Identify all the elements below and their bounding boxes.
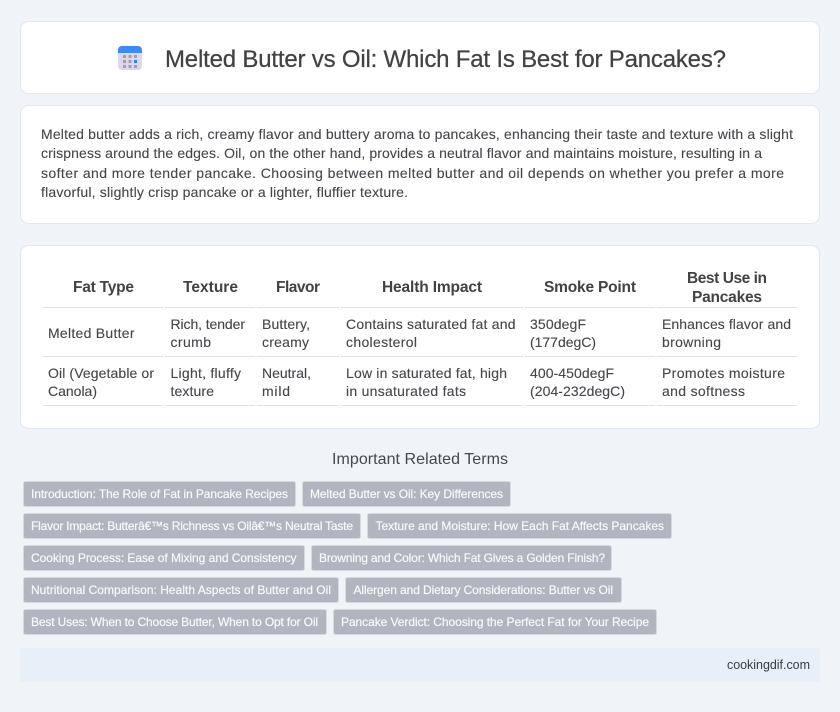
- table header row: Health Impact: [382, 279, 482, 296]
- table row: oil: Canola): [48, 383, 97, 399]
- tag: Browning and Color: Which Fat Gives a Golden Finish?: [319, 551, 605, 565]
- tag: Melted Butter vs Oil: Key Differences: [310, 487, 503, 501]
- table row: oil: texture: [170, 383, 214, 399]
- table row: oil: Light, fluffy: [170, 365, 241, 381]
- table row: oil: in unsaturated fats: [346, 383, 466, 399]
- text block: introduction: softer and more tender pancake. Choosing between melted butter and oil depends on whether you prefer a more: [41, 165, 784, 181]
- panel: introduction: [20, 106, 820, 224]
- table row: oil: mild: [262, 383, 290, 399]
- table row: melted butter: cholesterol: [346, 334, 417, 350]
- table row: oil: and softness: [662, 383, 745, 399]
- table row: oil: [48, 365, 785, 399]
- tag: [368, 514, 672, 538]
- table row: oil: Oil (Vegetable or: [48, 365, 154, 381]
- table header row: Pancakes: [692, 289, 762, 306]
- table row: oil: (204-232degC): [530, 383, 625, 399]
- text block: introduction: Melted butter adds a rich, creamy flavor and buttery aroma to pancakes, enhancing their taste and texture with a slight: [41, 126, 793, 142]
- table row: melted butter: creamy: [262, 334, 309, 350]
- tag: Cooking Process: Ease of Mixing and Consistency: [31, 551, 296, 565]
- table row: melted butter: Contains saturated fat and: [346, 316, 516, 332]
- footer source text: cookingdif.com: [727, 658, 810, 672]
- table row: melted butter: Enhances flavor and: [662, 316, 791, 332]
- tag: Nutritional Comparison: Health Aspects of Butter and Oil: [31, 583, 331, 597]
- tag: Best Uses: When to Choose Butter, When to Opt for Oil: [31, 615, 318, 629]
- text block: introduction: flavorful, slightly crisp pancake or a lighter, fluffier texture.: [41, 184, 408, 200]
- tag: Allergen and Dietary Considerations: Butter vs Oil: [354, 583, 613, 597]
- table row: melted butter: Melted Butter: [48, 325, 135, 341]
- footer: [20, 648, 820, 682]
- tag: [24, 482, 296, 506]
- text block: introduction: crispness around the edges. Oil, on the other hand, provides a neutral flavor and maintains moisture, resulting in a: [41, 145, 762, 161]
- table row: melted butter: Rich, tender: [170, 316, 245, 332]
- tag: [24, 514, 360, 538]
- panel: comparison table: [20, 246, 820, 428]
- table row: melted butter: (177degC): [530, 334, 596, 350]
- table header row: Smoke Point: [544, 279, 636, 296]
- table row: melted butter: 350degF: [530, 316, 586, 332]
- table row: oil: Neutral,: [262, 365, 311, 381]
- tag: Pancake Verdict: Choosing the Perfect Fat for Your Recipe: [341, 615, 649, 629]
- tag: [346, 578, 622, 602]
- table row: melted butter: crumb: [170, 334, 211, 350]
- tag: [24, 546, 304, 570]
- tag: [24, 610, 326, 634]
- table row: melted butter: browning: [662, 334, 721, 350]
- table header row: Best Use in: [687, 270, 767, 287]
- tag: Introduction: The Role of Fat in Pancake Recipes: [31, 487, 288, 501]
- tag: Flavor Impact: Butterâ€™s Richness vs Oilâ€™s Neutral Taste: [31, 519, 353, 533]
- table header row: [73, 270, 767, 306]
- heading: important related terms: Important Related Terms: [332, 451, 508, 468]
- tag: Texture and Moisture: How Each Fat Affects Pancakes: [376, 519, 664, 533]
- table header row: Fat Type: [73, 279, 134, 296]
- table row: oil: Promotes moisture: [662, 365, 785, 381]
- title: Melted Butter vs Oil: Which Fat Is Best for Pancakes?: [165, 46, 726, 73]
- tag: [24, 578, 338, 602]
- tag: [312, 546, 612, 570]
- table header row: Flavor: [276, 279, 320, 296]
- table row: melted butter: Buttery,: [262, 316, 310, 332]
- icon: calendar: [118, 46, 142, 70]
- table row: oil: 400-450degF: [530, 365, 614, 381]
- text block: introduction: [41, 126, 793, 200]
- panel: header: [20, 22, 820, 94]
- table row: melted butter: [48, 316, 791, 350]
- tag list: related terms: [24, 482, 672, 634]
- table header row: Texture: [183, 279, 238, 296]
- tag: [302, 482, 510, 506]
- tag: [334, 610, 656, 634]
- table row: oil: Low in saturated fat, high: [346, 365, 507, 381]
